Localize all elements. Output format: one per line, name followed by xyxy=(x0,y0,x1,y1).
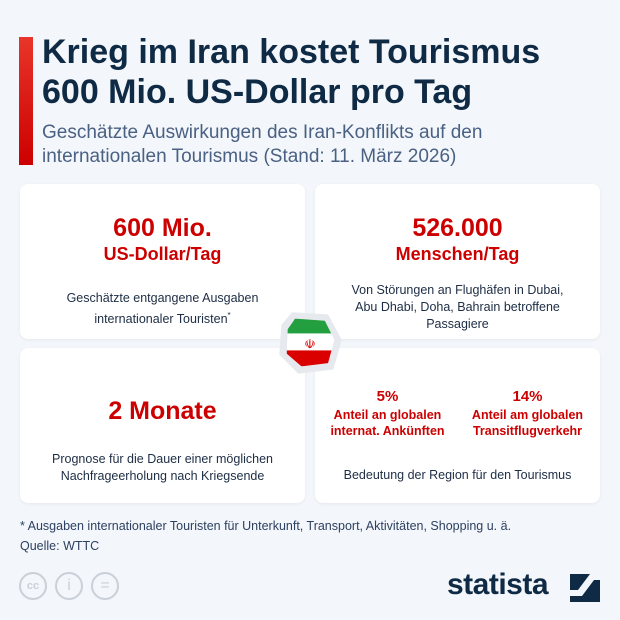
icon: cc licence xyxy=(19,572,119,600)
footnote xyxy=(20,519,511,553)
panel: recovery xyxy=(20,348,305,503)
icon: cc licence: cc xyxy=(27,580,39,592)
panel: passengers: Von Störungen an Flughäfen in Dubai, xyxy=(352,283,563,297)
panel: region share: 14% xyxy=(512,388,543,405)
panel: region share: internat. Ankünften xyxy=(330,424,445,438)
panel: region share xyxy=(315,348,600,503)
panel: passengers: Abu Dhabi, Doha, Bahrain betroffene xyxy=(355,300,560,314)
panel: region share: Anteil an globalen xyxy=(334,408,441,422)
panel: recovery: Prognose für die Dauer einer möglichen xyxy=(52,452,273,466)
panel: spending: US-Dollar/Tag xyxy=(104,244,221,264)
icon: iran flag xyxy=(279,312,342,374)
logo: statista xyxy=(447,568,600,602)
subtitle xyxy=(42,122,482,167)
icon: iran flag: ☫ xyxy=(304,336,316,351)
subtitle: Geschätzte Auswirkungen des Iran-Konflikts auf den xyxy=(42,122,482,143)
icon: cc licence: = xyxy=(100,577,110,594)
panel: passengers xyxy=(315,184,600,339)
title: Krieg im Iran kostet Tourismus xyxy=(42,33,540,71)
panel: recovery: Nachfrageerholung nach Kriegsende xyxy=(61,469,264,483)
panel: spending: Geschätzte entgangene Ausgaben xyxy=(67,291,258,305)
accent bar xyxy=(19,37,33,165)
panel: passengers: Menschen/Tag xyxy=(396,244,519,264)
panel: recovery: 2 Monate xyxy=(108,397,217,425)
footnote: * Ausgaben internationaler Touristen für Unterkunft, Transport, Aktivitäten, Shopping u. ä. xyxy=(20,519,511,533)
subtitle: internationalen Tourismus (Stand: 11. März 2026) xyxy=(42,146,456,167)
logo: statista: statista xyxy=(447,568,548,601)
title xyxy=(42,33,540,111)
panel: passengers: Passagiere xyxy=(426,317,489,331)
panel: spending: 600 Mio. xyxy=(113,214,212,242)
panel: region share: Transitflugverkehr xyxy=(473,424,582,438)
panel: region share: Bedeutung der Region für den Tourismus xyxy=(344,468,571,482)
panel: passengers: 526.000 xyxy=(412,214,503,242)
icon: cc licence: i xyxy=(67,577,71,594)
panel: region share: 5% xyxy=(377,388,398,405)
panel: spending xyxy=(20,184,305,339)
title: 600 Mio. US-Dollar pro Tag xyxy=(42,73,472,111)
panel: spending: internationaler Touristen* xyxy=(94,311,231,326)
footnote: Quelle: WTTC xyxy=(20,539,99,553)
panel: region share: Anteil am globalen xyxy=(472,408,583,422)
